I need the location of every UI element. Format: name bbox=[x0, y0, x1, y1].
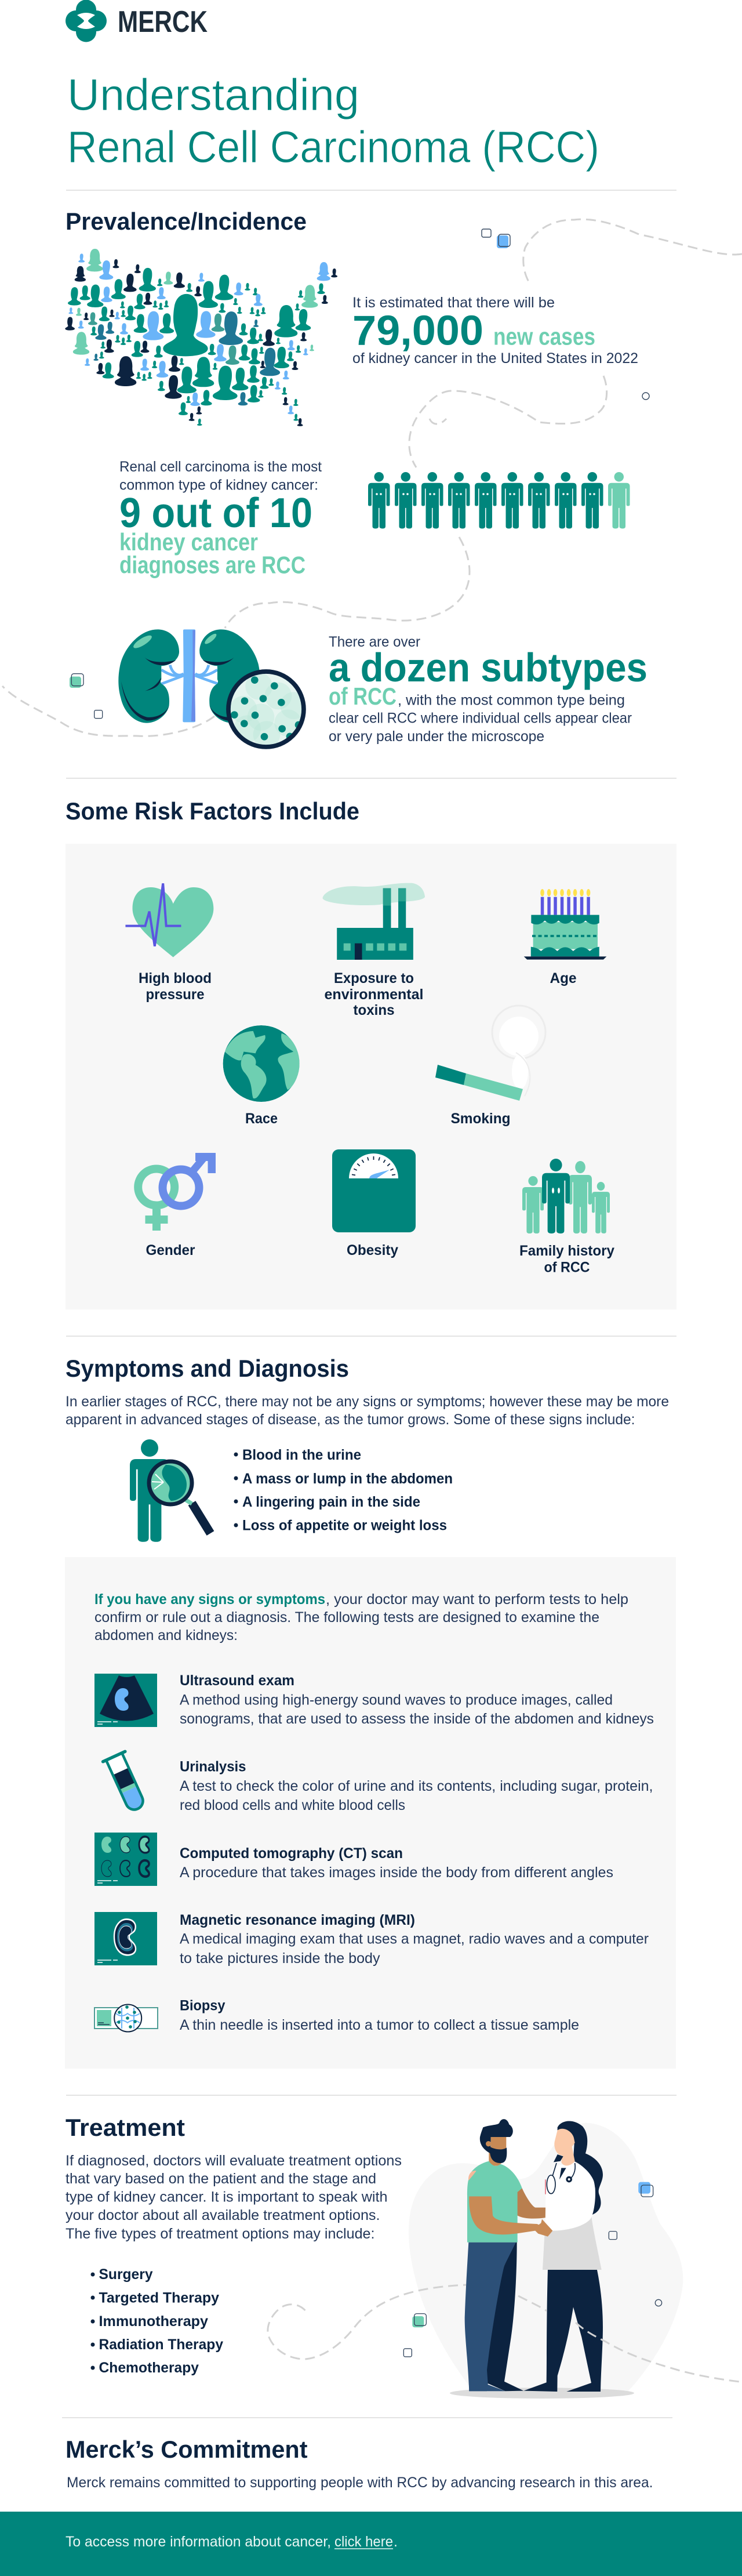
label: gender: Gender bbox=[146, 1242, 195, 1258]
list: treatments: Surgery bbox=[99, 2266, 153, 2283]
text: treatment intro bbox=[66, 2153, 402, 2242]
label: obesity: Obesity bbox=[347, 1242, 398, 1258]
floating squares near kidneys bbox=[70, 674, 103, 719]
stat: a dozen subtypes: clear cell RCC where individual cells appear clear bbox=[329, 710, 632, 726]
test: urinalysis text bbox=[180, 1758, 653, 1813]
footer band: . bbox=[394, 2534, 398, 2550]
heading: commitment: Merck’s Commitment bbox=[66, 2436, 307, 2463]
aorta bbox=[183, 629, 195, 722]
text: treatment intro: If diagnosed, doctors will evaluate treatment options bbox=[66, 2153, 402, 2169]
stat: a dozen subtypes: , with the most common type being bbox=[398, 692, 625, 709]
title bbox=[67, 70, 599, 172]
list: treatments bbox=[90, 2266, 223, 2376]
heading: prevalence: Prevalence/Incidence bbox=[66, 208, 307, 235]
test: biopsy text bbox=[180, 1997, 579, 2033]
stat: 79,000 new cases bbox=[352, 295, 638, 367]
stat: a dozen subtypes: or very pale under the microscope bbox=[329, 728, 544, 745]
title: Renal Cell Carcinoma (RCC) bbox=[67, 122, 599, 172]
doctor bbox=[523, 2121, 603, 2392]
footer band: click here bbox=[334, 2534, 393, 2550]
illustration: patient and doctor bbox=[403, 2119, 683, 2399]
icon: cigarette and smoke bbox=[435, 1006, 545, 1101]
label: environmental toxins bbox=[325, 970, 423, 1018]
stat: a dozen subtypes: a dozen subtypes bbox=[329, 645, 648, 690]
list: treatments: Immunotherapy bbox=[99, 2313, 208, 2330]
stat: 9 out of 10: diagnoses are RCC bbox=[119, 551, 305, 579]
test: urinalysis text: red blood cells and white blood cells bbox=[180, 1797, 405, 1813]
footer band: To access more information about cancer, bbox=[66, 2534, 331, 2550]
label: high blood pressure: High blood bbox=[139, 970, 212, 986]
stat: a dozen subtypes: There are over bbox=[329, 634, 420, 650]
test: CT text bbox=[180, 1845, 613, 1881]
text: tests intro: , your doctor may want to perform tests to help bbox=[326, 1591, 628, 1608]
kidneys with microscope view bbox=[70, 629, 307, 748]
test: MRI text bbox=[180, 1912, 649, 1967]
test: CT text: A procedure that takes images inside the body from different angles bbox=[180, 1864, 613, 1881]
test: MRI text: A medical imaging exam that uses a magnet, radio waves and a computer bbox=[180, 1931, 649, 1947]
label: family history: of RCC bbox=[544, 1260, 590, 1276]
test: urinalysis text: Urinalysis bbox=[180, 1758, 246, 1775]
stat: 9 out of 10: kidney cancer bbox=[119, 528, 258, 556]
icon: person under magnifying glass bbox=[130, 1439, 210, 1542]
test: urinalysis text: A test to check the color of urine and its contents, including sugar, protein, bbox=[180, 1778, 653, 1794]
text: treatment intro: that vary based on the patient and the stage and bbox=[66, 2171, 376, 2187]
right kidney bbox=[199, 629, 260, 723]
stat: 79,000 new cases: 79,000 bbox=[352, 307, 483, 354]
stat: 79,000 new cases: new cases bbox=[493, 322, 595, 350]
logo bbox=[66, 0, 208, 42]
list: symptoms: A mass or lump in the abdomen bbox=[242, 1471, 453, 1487]
dashed decorative path bbox=[523, 219, 742, 284]
ground shadow bbox=[450, 2388, 634, 2399]
label: race: Race bbox=[245, 1111, 278, 1127]
icon: factory bbox=[323, 883, 425, 960]
text: tests intro: confirm or rule out a diagnosis. The following tests are designed to examine the bbox=[94, 1609, 599, 1626]
icon: gender symbols bbox=[138, 1153, 216, 1231]
heading: symptoms: Symptoms and Diagnosis bbox=[66, 1355, 349, 1382]
label: high blood pressure bbox=[139, 970, 212, 1003]
stat: 9 out of 10: Renal cell carcinoma is the most bbox=[119, 459, 322, 475]
icon: birthday cake bbox=[524, 889, 606, 960]
stat: 79,000 new cases: of kidney cancer in the United States in 2022 bbox=[352, 350, 638, 367]
list: symptoms: Loss of appetite or weight loss bbox=[242, 1517, 447, 1533]
text: symptoms intro: apparent in advanced stages of disease, as the tumor grows. Some of these signs include: bbox=[66, 1412, 635, 1428]
test: biopsy text: A thin needle is inserted into a tumor to collect a tissue sample bbox=[180, 2017, 579, 2033]
label: environmental toxins: environmental bbox=[325, 986, 423, 1003]
text: symptoms intro bbox=[66, 1394, 669, 1428]
list: treatments: Targeted Therapy bbox=[99, 2290, 219, 2306]
heading: risk factors: Some Risk Factors Include bbox=[66, 797, 359, 825]
panel: risk factors bbox=[125, 883, 614, 1272]
test: ultrasound text: A method using high-energy sound waves to produce images, called bbox=[180, 1692, 613, 1708]
label: family history: Family history bbox=[519, 1243, 614, 1259]
stat: a dozen subtypes: of RCC bbox=[329, 683, 397, 710]
list: symptoms: A lingering pain in the side bbox=[242, 1494, 420, 1510]
text: tests intro: abdomen and kidneys: bbox=[94, 1627, 238, 1643]
icon: heart with pulse bbox=[125, 883, 213, 957]
label: high blood pressure: pressure bbox=[146, 986, 205, 1003]
man bbox=[465, 2119, 552, 2391]
stat: 9 out of 10: 9 out of 10 bbox=[119, 490, 312, 536]
test: ultrasound text: sonograms, that are used to assess the inside of the abdomen and kidneys bbox=[180, 1711, 654, 1727]
text: symptoms intro: In earlier stages of RCC, there may not be any signs or symptoms; however these may be more bbox=[66, 1394, 669, 1410]
list: symptoms bbox=[234, 1447, 453, 1533]
logo: MERCK bbox=[118, 5, 208, 39]
test: biopsy text: Biopsy bbox=[180, 1997, 225, 2013]
text: tests intro bbox=[94, 1591, 628, 1643]
test: CT text: Computed tomography (CT) scan bbox=[180, 1845, 403, 1862]
text: treatment intro: type of kidney cancer. It is important to speak with bbox=[66, 2189, 387, 2205]
icon: ultrasound bbox=[94, 1674, 157, 1727]
test: MRI text: to take pictures inside the body bbox=[180, 1950, 380, 1967]
stat: 9 out of 10 bbox=[119, 459, 322, 579]
icon: family bbox=[522, 1159, 610, 1233]
background blob bbox=[409, 2123, 683, 2391]
icon: MRI bbox=[94, 1912, 157, 1965]
label: environmental toxins: toxins bbox=[354, 1002, 394, 1018]
label: family history bbox=[519, 1243, 614, 1276]
ureter branches bbox=[161, 665, 219, 684]
floating squares around figures bbox=[403, 2182, 662, 2357]
floating squares bbox=[482, 229, 649, 400]
stat: 79,000 new cases: It is estimated that there will be bbox=[352, 295, 555, 311]
stat: 9 out of 10: common type of kidney cancer: bbox=[119, 477, 318, 493]
title: Understanding bbox=[67, 70, 359, 120]
label: age: Age bbox=[550, 970, 577, 986]
panel: diagnostic tests bbox=[65, 1557, 676, 2069]
heading: treatment: Treatment bbox=[66, 2114, 185, 2141]
text: commitment: Merck remains committed to supporting people with RCC by advancing research in this area. bbox=[67, 2475, 653, 2491]
icon: biopsy slide bbox=[94, 2004, 158, 2032]
list: treatments: Chemotherapy bbox=[99, 2360, 199, 2376]
icon: weighing scale bbox=[332, 1149, 416, 1232]
left kidney bbox=[118, 629, 179, 723]
stat: a dozen subtypes bbox=[329, 634, 648, 745]
dashed curve beside treatment figures bbox=[268, 2285, 466, 2359]
list: symptoms: Blood in the urine bbox=[242, 1447, 361, 1463]
test: MRI text: Magnetic resonance imaging (MRI) bbox=[180, 1912, 415, 1928]
test: ultrasound text: Ultrasound exam bbox=[180, 1672, 294, 1689]
microscope circle bbox=[228, 672, 307, 748]
text: tests intro: If you have any signs or symptoms bbox=[94, 1591, 325, 1608]
icon: CT scan bbox=[94, 1833, 157, 1886]
text: treatment intro: The five types of treatment options may include: bbox=[66, 2226, 374, 2242]
test: ultrasound text bbox=[180, 1672, 654, 1727]
icon: test tube bbox=[103, 1751, 149, 1814]
text: treatment intro: your doctor about all available treatment options. bbox=[66, 2207, 380, 2223]
map of US made of people bbox=[65, 249, 337, 426]
footer band bbox=[0, 2512, 742, 2576]
icon: globe bbox=[223, 1025, 303, 1102]
label: smoking: Smoking bbox=[451, 1111, 510, 1127]
label: environmental toxins: Exposure to bbox=[334, 970, 414, 986]
row of ten people icons bbox=[368, 472, 630, 529]
list: treatments: Radiation Therapy bbox=[99, 2336, 223, 2353]
